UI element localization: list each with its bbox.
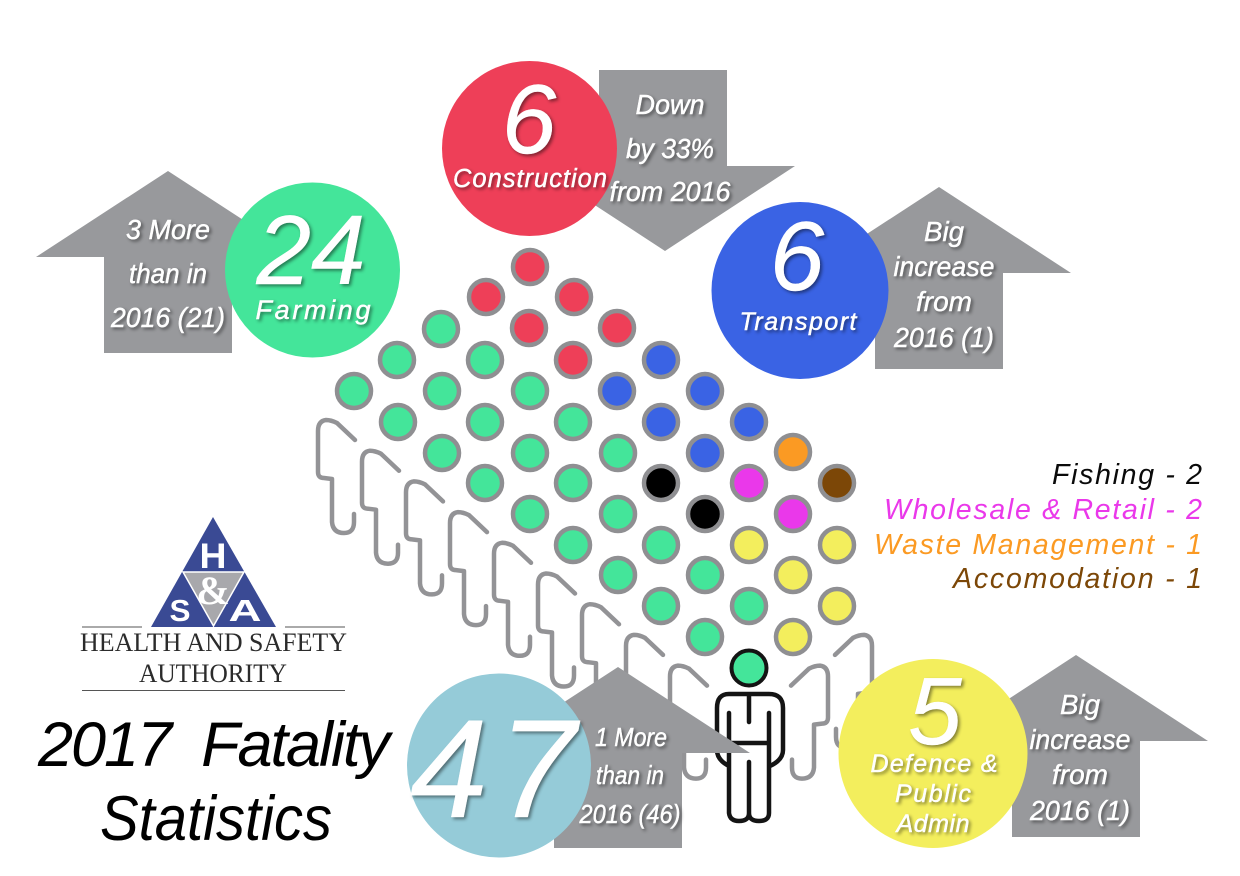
defence figures: 5 (908, 658, 962, 765)
farming figures: 24 (255, 195, 366, 305)
dots: transport (600, 343, 766, 470)
people outlines, left queue (318, 420, 707, 779)
defence change text: from (1052, 759, 1108, 790)
total change text: than in (596, 760, 664, 790)
transport change text: 2016 (1) (893, 322, 994, 353)
logo name (80, 628, 347, 688)
defence change text: 2016 (1) (1029, 795, 1130, 826)
legend: other sectors: Waste Management - 1 (874, 529, 1202, 561)
farming change text: 3 More (126, 214, 210, 245)
title (37, 710, 394, 854)
title: 2017 Fatality (37, 710, 394, 780)
logo name: AUTHORITY (139, 659, 287, 688)
construction figures (453, 64, 607, 193)
farming figures: Farming (256, 295, 370, 325)
logo name: HEALTH AND SAFETY (80, 628, 347, 657)
defence figures: Defence & (870, 750, 998, 778)
construction change text: by 33% (626, 133, 714, 164)
panel: defence and public admin (838, 655, 1208, 848)
arrow: total up (486, 667, 750, 848)
logo triangle mark: H (200, 537, 226, 576)
defence figures: Public (895, 780, 972, 808)
dots: farming (337, 312, 766, 654)
dots: accommodation (820, 466, 854, 500)
farming change text: 2016 (21) (110, 302, 225, 333)
defence change text: increase (1030, 724, 1130, 755)
legend: other sectors (874, 459, 1202, 595)
defence circle (838, 659, 1028, 848)
dots: construction (469, 250, 634, 377)
total change text: 1 More (595, 722, 667, 752)
transport circle (712, 202, 888, 379)
total circle (407, 674, 591, 858)
total change text: 2016 (46) (579, 799, 680, 829)
panel: farming (36, 171, 400, 358)
transport change text: from (916, 286, 972, 317)
front person icon (717, 650, 783, 821)
defence change text: Big (1060, 689, 1100, 720)
transport change text: Big (924, 216, 964, 247)
total change text (579, 722, 680, 829)
legend: other sectors: Wholesale & Retail - 2 (884, 494, 1202, 526)
logo: Health and Safety Authority (80, 517, 347, 690)
arrow: construction down (535, 70, 795, 251)
panel: total (407, 667, 750, 858)
dots: fishing (644, 466, 722, 531)
logo triangle mark: A (228, 593, 262, 628)
defence figures: Admin (894, 810, 970, 838)
logo triangle mark: S (170, 593, 190, 628)
logo rules (82, 627, 345, 690)
farming change text: than in (129, 258, 207, 289)
transport figures: Transport (740, 308, 858, 336)
people outlines, right queue (791, 635, 872, 779)
logo triangle mark (151, 517, 276, 628)
transport change text: increase (894, 251, 994, 282)
panel: construction (442, 61, 795, 251)
construction circle (442, 61, 617, 236)
dots: defence (732, 528, 854, 654)
farming circle (225, 182, 400, 358)
dot grid of 47 fatalities (337, 250, 854, 654)
logo triangle mark: & (196, 568, 230, 613)
legend: other sectors: Accomodation - 1 (951, 563, 1202, 595)
panel: transport (712, 187, 1071, 379)
construction change text (610, 89, 731, 207)
legend: other sectors: Fishing - 2 (1052, 459, 1202, 491)
farming change text (110, 214, 225, 333)
arrow: defence up (944, 655, 1208, 837)
total figure: 47 (410, 690, 581, 847)
arrow: transport up (807, 187, 1071, 369)
arrow: farming up (36, 171, 300, 353)
transport figures (740, 201, 858, 336)
dots: wholesale and retail (732, 466, 810, 531)
defence figures (870, 658, 998, 838)
construction change text: from 2016 (610, 176, 731, 207)
dots: waste management (776, 435, 810, 469)
defence change text (1029, 689, 1130, 826)
transport figures: 6 (770, 201, 825, 311)
transport change text (893, 216, 994, 353)
construction change text: Down (636, 89, 704, 120)
title: Statistics (100, 784, 332, 854)
construction figures: 6 (502, 64, 557, 174)
construction figures: Construction (453, 165, 607, 193)
